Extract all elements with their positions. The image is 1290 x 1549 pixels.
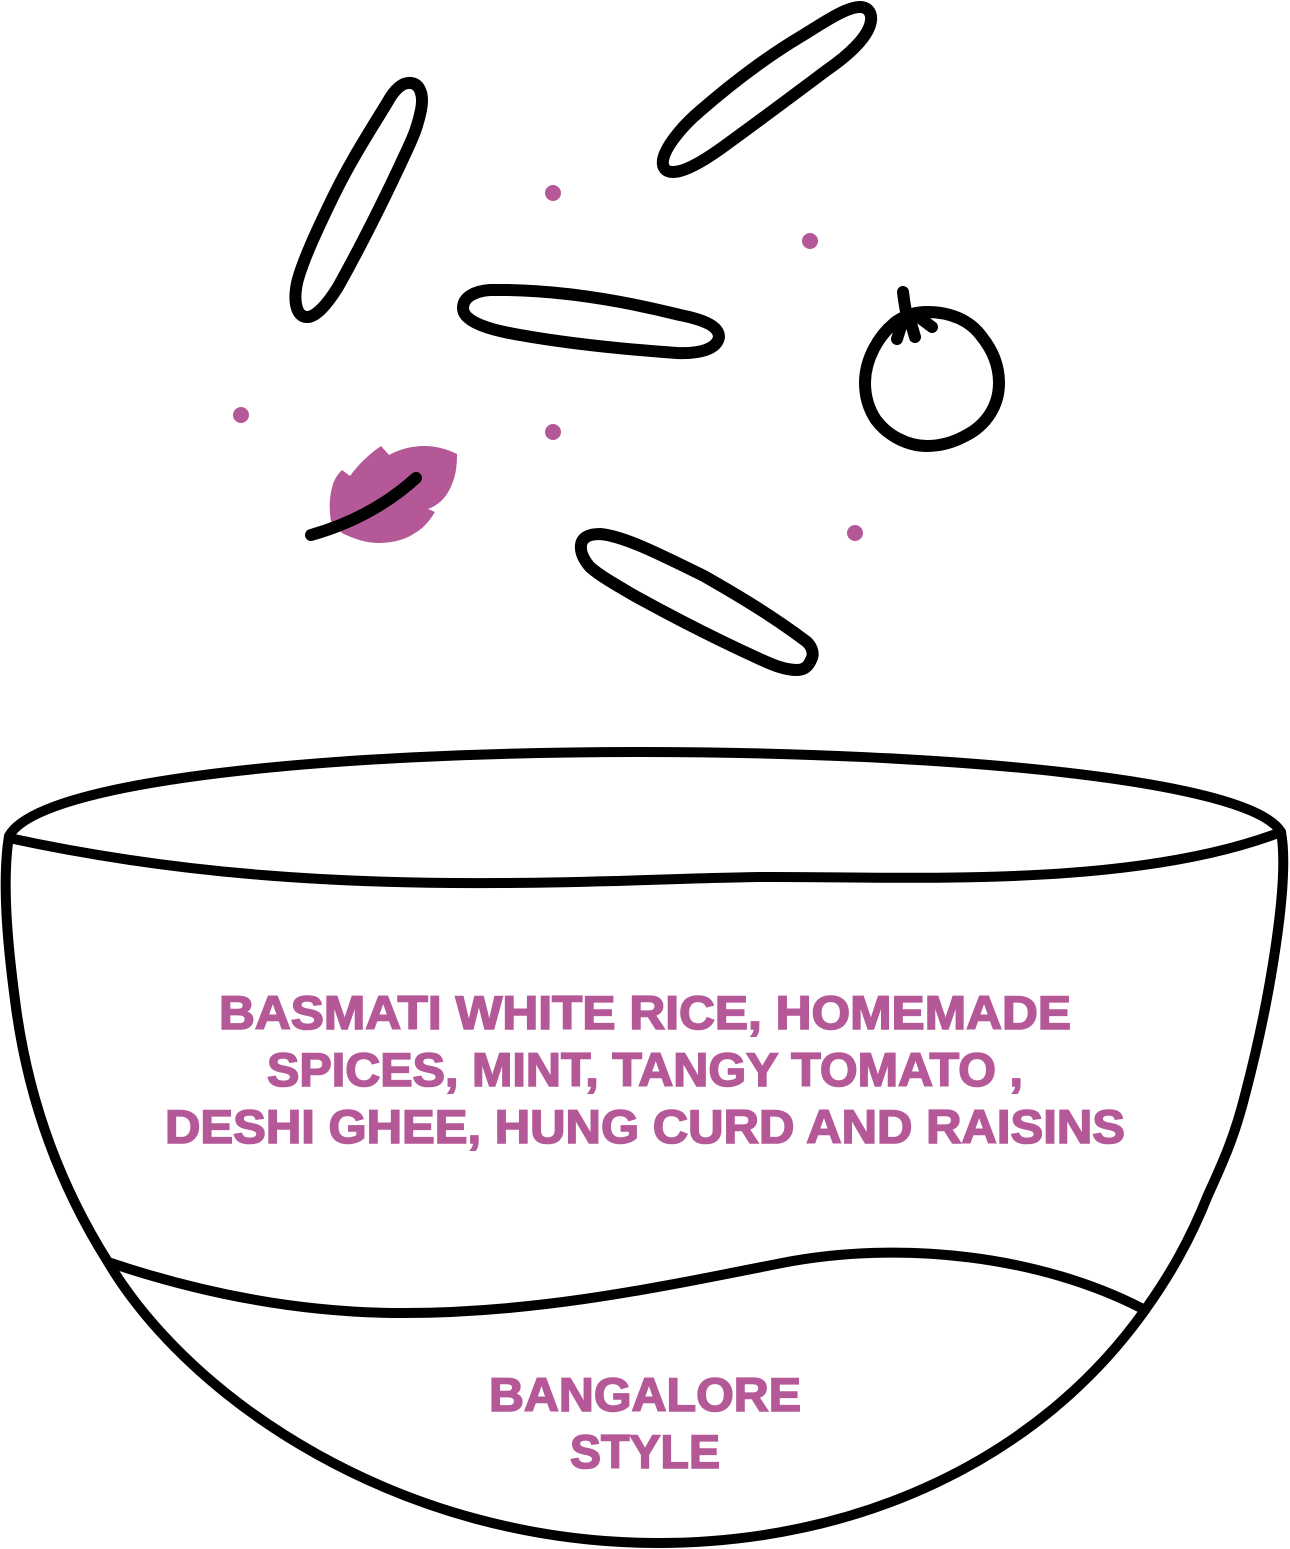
ingredients text: SPICES, MINT, TANGY TOMATO , [267,1043,1023,1096]
icon: tomato [865,292,999,446]
style label [489,1368,801,1478]
decorative dots [233,185,863,541]
icon: rice grain top right [663,7,871,172]
icon: rice grain left [295,83,422,317]
ingredients text: BASMATI WHITE RICE, HOMEMADE [219,986,1071,1039]
icon: rice grain middle [463,290,719,353]
icon: mint leaf [311,446,457,543]
style label: BANGALORE [489,1368,801,1421]
icon: rice grain bottom [581,534,813,670]
ingredients text: DESHI GHEE, HUNG CURD AND RAISINS [165,1100,1125,1153]
ingredients text [165,986,1125,1153]
style label: STYLE [570,1425,720,1478]
bowl outline [6,752,1283,1543]
